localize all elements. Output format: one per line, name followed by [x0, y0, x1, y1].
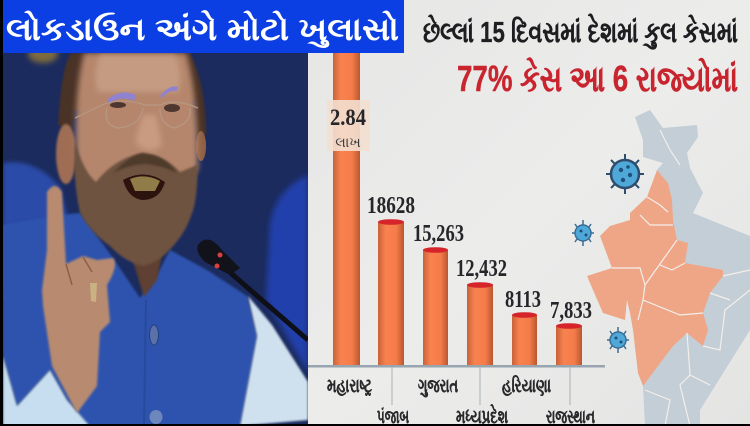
- category labels: હરિયાણા: [502, 374, 551, 397]
- map: grey northern states: [635, 110, 750, 426]
- face: [76, 53, 198, 190]
- neck: [132, 254, 162, 297]
- photo: minister speaking: [3, 45, 308, 426]
- bar chart: [308, 50, 605, 426]
- ears: [56, 124, 76, 184]
- title banner: [3, 0, 404, 53]
- map: orange highlighted states: [587, 170, 723, 386]
- right shirt sleeve: [240, 296, 308, 426]
- bar: Rajasthan: 7,833: [550, 298, 592, 324]
- bar: Haryana: 8113: [505, 287, 541, 313]
- bar: Rajasthan: [550, 298, 592, 365]
- bar: Haryana: [505, 287, 541, 365]
- virus icon large: [606, 154, 644, 194]
- bar: Gujarat: 15,263: [413, 221, 464, 247]
- virus icon small lower: [607, 327, 629, 353]
- eyebrows: [107, 92, 136, 104]
- bar: Madhya Pradesh: 12,432: [456, 256, 507, 282]
- value box: 2.84 lakh: [327, 100, 370, 151]
- microphone: [197, 240, 308, 340]
- left shirt cuff: [3, 356, 88, 426]
- chart heading: [423, 14, 738, 99]
- bar: Punjab: 18628: [367, 193, 415, 219]
- value box: 2.84 lakh: 2.84: [330, 105, 366, 130]
- vest placket and buttons: [144, 300, 146, 426]
- map of India: [587, 110, 750, 426]
- title banner: લોકડાઉન અંગે મોટો ખુલાસો: [6, 11, 399, 48]
- hair: [58, 53, 206, 135]
- map: state borders: [612, 130, 750, 426]
- raised hand: [42, 186, 115, 413]
- mouth: [123, 174, 165, 200]
- glasses: [75, 101, 198, 128]
- virus icon small upper: [572, 220, 594, 246]
- beard: [74, 140, 198, 266]
- category labels: [327, 374, 595, 426]
- category labels: ગુજરાત: [418, 376, 458, 397]
- bar: Gujarat: [413, 221, 464, 365]
- bar: Punjab: [367, 193, 415, 365]
- bar: Madhya Pradesh: [456, 256, 507, 365]
- vest: [3, 213, 257, 426]
- bar: Maharashtra: [333, 50, 360, 365]
- panel: infographic on paper: [308, 0, 750, 426]
- value box: 2.84 lakh: લાખ: [335, 134, 361, 150]
- nose: [135, 115, 162, 150]
- category labels: મહારાષ્ટ્ર: [327, 376, 372, 397]
